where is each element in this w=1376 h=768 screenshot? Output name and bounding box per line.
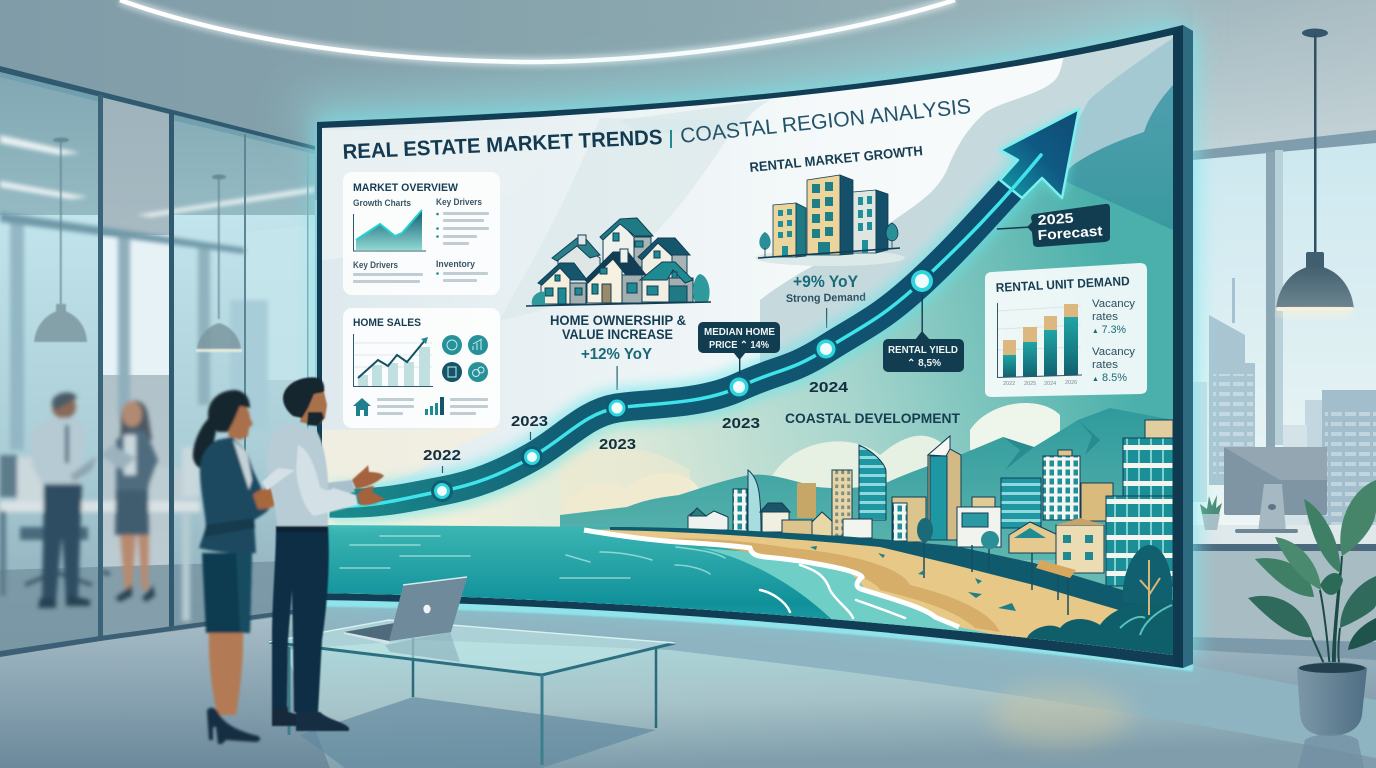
coastal development heading: COASTAL DEVELOPMENT — [785, 411, 961, 426]
bar chart year axis: 2022 — [1003, 381, 1015, 387]
man hair — [283, 377, 324, 418]
blurred woman — [100, 401, 158, 602]
woman presenter — [193, 390, 280, 744]
left monitor — [0, 455, 17, 497]
chair back — [17, 457, 43, 507]
callout: rental yield: RENTAL YIELD — [888, 345, 958, 356]
home sales icon: chart — [468, 335, 488, 355]
table legs back — [413, 638, 656, 728]
cream wash at lower left — [322, 428, 500, 485]
panel: market overview — [343, 172, 500, 295]
wave blue — [1069, 38, 1173, 169]
arrow band — [330, 168, 1030, 503]
houses ground line — [526, 302, 711, 306]
icon: rental buildings — [755, 175, 905, 266]
right windows and desk — [1190, 28, 1376, 662]
ceiling right section — [1193, 0, 1376, 155]
man face — [300, 392, 327, 426]
table legs front — [289, 647, 542, 765]
key driver bullet lines — [436, 212, 489, 245]
vacancy rates lower — [1092, 346, 1136, 384]
title right: COASTAL REGION ANALYSIS — [679, 95, 972, 148]
screen glow — [300, 20, 1195, 668]
pale floor reflection — [285, 640, 1376, 768]
lower summary lines — [353, 272, 488, 283]
bar chart year axis: 2025 — [1024, 381, 1036, 387]
home sales chart — [354, 334, 433, 386]
home sales icon: coins — [468, 362, 488, 382]
man trousers — [272, 527, 329, 712]
callout: median home price: MEDIAN HOME — [704, 327, 775, 338]
man presenter — [267, 377, 385, 731]
pendant lamp right — [1275, 28, 1355, 319]
glass frames — [0, 66, 320, 657]
mountains — [560, 408, 1173, 560]
arrow glow — [330, 168, 1030, 503]
leader line — [616, 366, 618, 390]
second key drivers label: Key Drivers — [353, 260, 398, 271]
woman ponytail — [193, 415, 216, 469]
wet sand — [640, 538, 1000, 632]
bar chart year axis: 2026 — [1065, 380, 1077, 386]
vacancy rates lower: ▲ 8.5% — [1092, 372, 1127, 384]
man back cuff — [326, 480, 355, 497]
callout: rental yield — [883, 295, 964, 372]
reflected pendant lamps — [34, 138, 242, 352]
bar chart year axis — [1003, 380, 1077, 387]
year 2023 first: 2023 — [511, 413, 548, 430]
rental unit demand heading: RENTAL UNIT DEMAND — [995, 274, 1130, 295]
coastal skyline — [688, 420, 1173, 586]
surf line — [584, 530, 959, 627]
sea foam — [760, 565, 905, 618]
timeline nodes — [431, 267, 936, 502]
screen content — [322, 30, 1173, 670]
promenade — [610, 518, 1136, 615]
home ownership heading: HOME OWNERSHIP & — [550, 313, 686, 328]
ceiling light ring — [120, 0, 955, 62]
growth arrow — [330, 109, 1079, 506]
title — [342, 95, 972, 164]
cyan centre line — [345, 155, 1041, 506]
floor under screen — [270, 600, 1376, 768]
presenters — [193, 377, 385, 744]
value increase heading: VALUE INCREASE — [562, 327, 673, 342]
window sky — [1190, 143, 1376, 540]
woman hair — [208, 390, 250, 432]
office desks and blurred colleagues — [0, 392, 200, 621]
strong demand: Strong Demand — [786, 292, 866, 305]
sand beach — [584, 529, 1173, 655]
year labels — [423, 379, 849, 473]
icon: houses cluster — [526, 218, 711, 306]
man sleeve — [296, 445, 358, 516]
screen base — [322, 30, 1173, 670]
vacancy rates upper: ▲ 7.3% — [1092, 324, 1126, 336]
bar chart year axis: 2024 — [1044, 381, 1056, 387]
left glass wall — [0, 60, 320, 660]
vacancy rates upper: Vacancy — [1092, 298, 1136, 310]
vacancy rates upper: rates — [1092, 311, 1119, 323]
home ownership text — [550, 313, 686, 390]
growth area chart — [354, 210, 426, 251]
monitor — [1224, 447, 1327, 533]
window frame — [1193, 130, 1376, 160]
table reflection — [385, 632, 460, 662]
glass table and laptop — [269, 577, 675, 765]
woman shoes — [207, 708, 260, 744]
panel: home sales — [343, 308, 500, 428]
inventory label: Inventory — [436, 259, 476, 270]
soft area under the growth curve — [322, 170, 1173, 620]
callout: 2025 forecast: Forecast — [1037, 222, 1103, 243]
callout: rental yield: ⌃ 8,5% — [907, 358, 941, 369]
tablet — [262, 468, 295, 490]
man hands — [352, 465, 385, 505]
title left: REAL ESTATE MARKET TRENDS — [342, 126, 663, 164]
rental yoy: +9% YoY — [793, 272, 859, 291]
arrow head — [1000, 109, 1079, 198]
chair seat — [20, 527, 88, 540]
table top — [269, 620, 675, 675]
arrow head glow — [1000, 109, 1079, 198]
woman hands — [253, 489, 280, 509]
icon: house — [353, 398, 371, 416]
man belt — [276, 526, 328, 532]
foliage corner — [1026, 600, 1173, 655]
desk — [1193, 525, 1376, 662]
rental stat — [786, 272, 866, 328]
ticks — [442, 432, 530, 473]
laptop logo — [423, 605, 431, 613]
man shoes — [272, 707, 296, 726]
year 2023 second: 2023 — [599, 436, 636, 453]
sea highlights — [340, 536, 725, 578]
title divider — [670, 130, 672, 148]
right monitor — [150, 467, 197, 500]
callout: median home price — [698, 322, 780, 374]
window reflections — [0, 135, 315, 450]
wave gray — [760, 35, 1173, 363]
woman jacket — [199, 437, 270, 554]
sky clouds — [562, 403, 1060, 514]
wall screen frame — [317, 25, 1193, 668]
vacancy rates lower: rates — [1092, 359, 1119, 371]
floor — [0, 600, 1376, 768]
wide ceiling glow — [300, 20, 1183, 118]
table shadow — [300, 697, 656, 768]
stacked bar chart — [998, 303, 1082, 387]
laptop — [344, 577, 467, 644]
woman face — [228, 405, 253, 440]
desk top — [0, 501, 200, 512]
key drivers label: Key Drivers — [436, 197, 482, 208]
year 2024: 2024 — [809, 379, 849, 396]
panel: rental unit demand — [985, 263, 1147, 397]
home sales icon: globe — [442, 335, 462, 355]
callout: 2025 forecast: 2025 — [1037, 210, 1074, 228]
woman legs — [209, 630, 243, 715]
ceiling — [0, 0, 1376, 200]
beach umbrellas and loungers — [810, 546, 1016, 611]
woman skirt — [202, 553, 252, 633]
year 2022: 2022 — [423, 447, 461, 464]
home sales text lines — [377, 398, 414, 415]
skyline — [1193, 278, 1376, 535]
icon: mini bars — [425, 397, 444, 415]
home sales icon: document — [442, 362, 462, 382]
home sales heading: HOME SALES — [353, 317, 421, 329]
shore water — [700, 548, 1018, 637]
wave teal right — [1066, 85, 1173, 230]
callout: median home price: PRICE ⌃ 14% — [709, 340, 769, 351]
sea — [326, 525, 980, 633]
blurred man — [32, 392, 97, 608]
home sales text lines right — [450, 398, 488, 415]
office floor behind glass — [0, 562, 293, 651]
home ownership stat: +12% YoY — [581, 346, 652, 363]
leader line — [826, 308, 827, 328]
man beard — [307, 412, 324, 426]
potted plant — [1248, 480, 1376, 768]
bright lower edge — [322, 603, 1193, 668]
tight screen glow — [317, 27, 1195, 662]
market overview heading: MARKET OVERVIEW — [353, 182, 459, 194]
man shirt — [267, 424, 328, 527]
year 2023 third: 2023 — [722, 415, 760, 432]
glass panels — [0, 60, 320, 660]
callout: 2025 forecast — [997, 204, 1110, 247]
small desk plant — [1200, 495, 1222, 530]
vacancy rates upper — [1092, 298, 1136, 336]
vacancy rates lower: Vacancy — [1092, 346, 1136, 358]
rental market heading: RENTAL MARKET GROWTH — [749, 143, 923, 175]
growth charts label: Growth Charts — [353, 198, 411, 209]
